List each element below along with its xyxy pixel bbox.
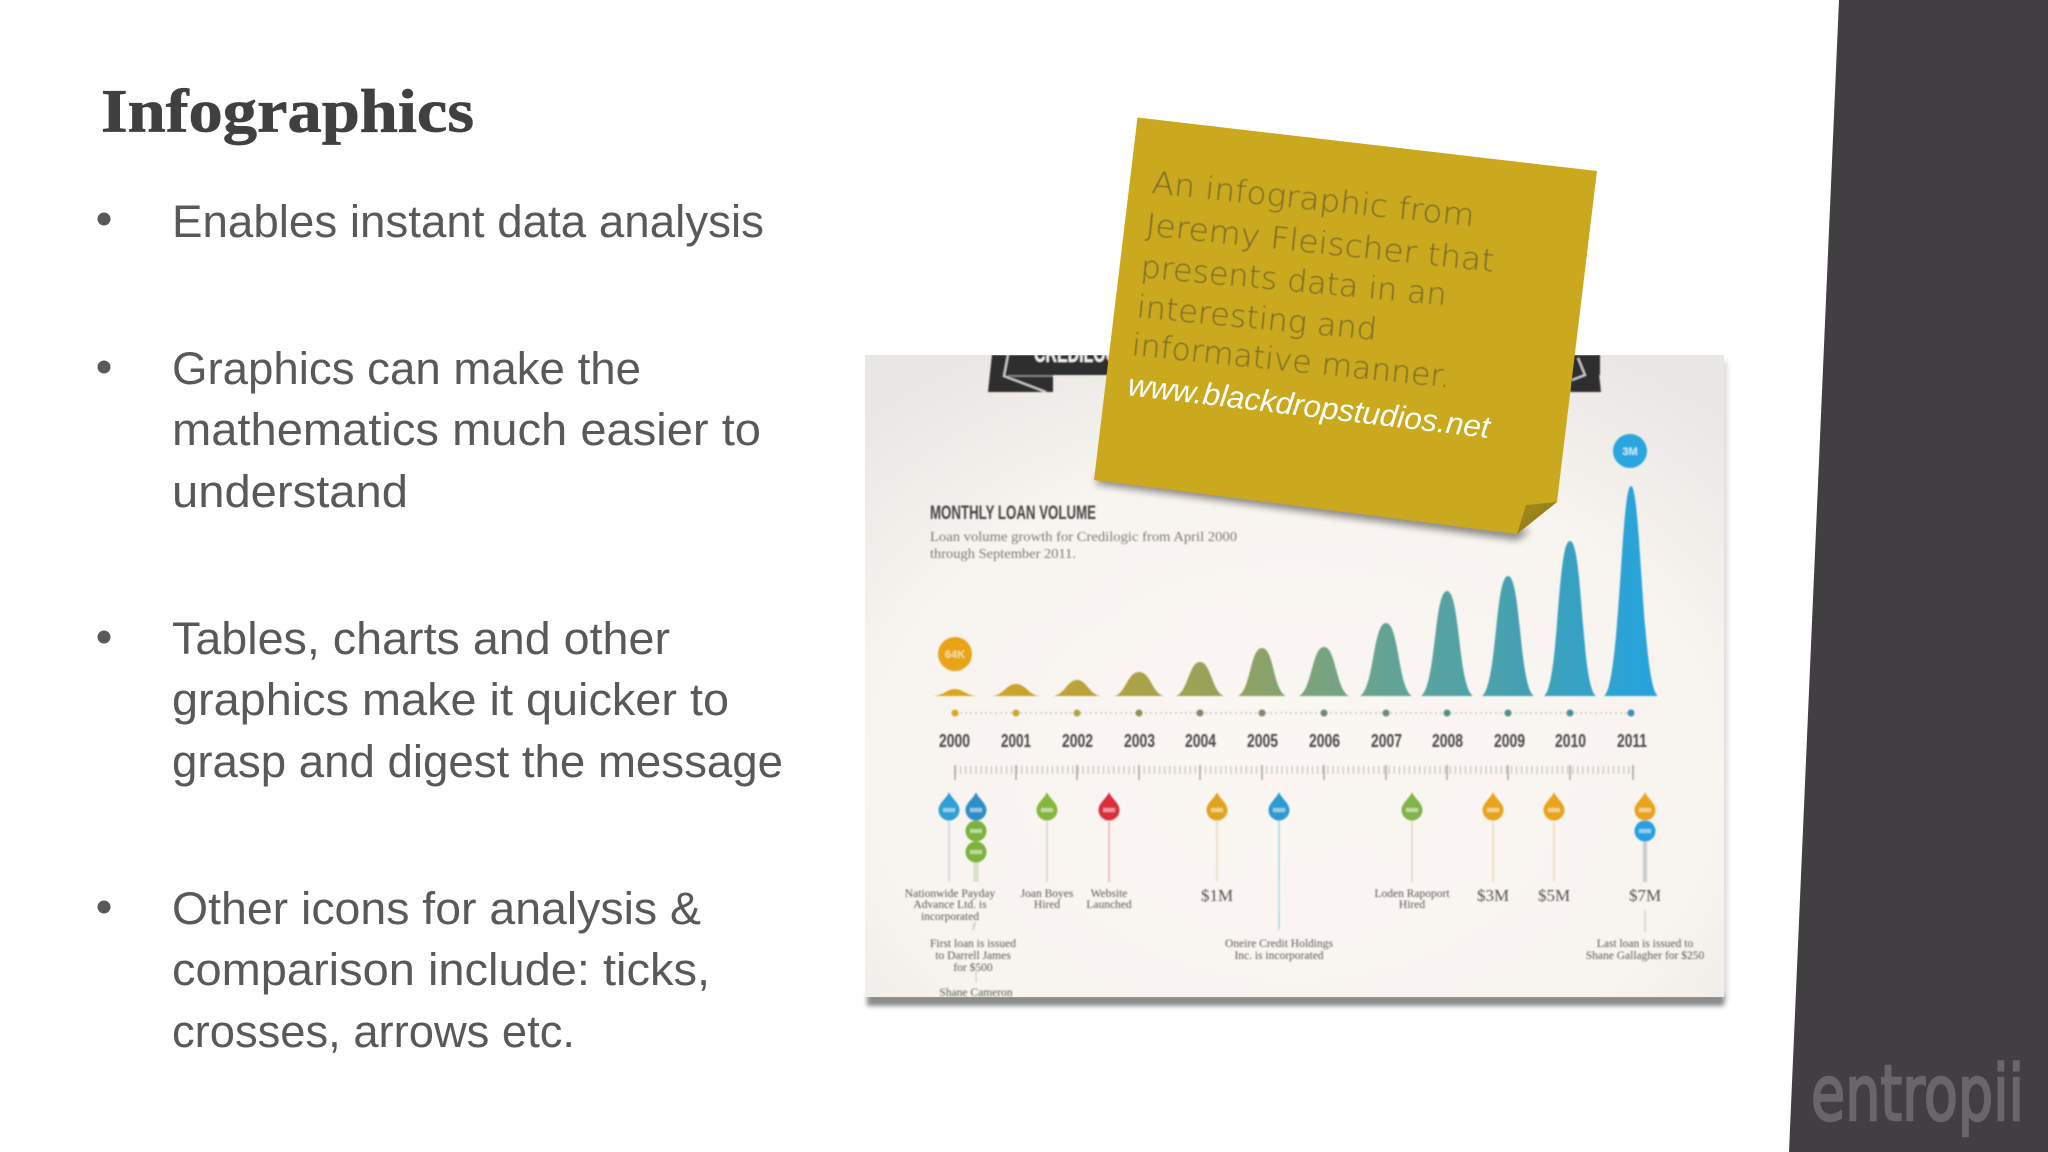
year labels: 2005 [1247,731,1278,751]
event labels: for $500 [953,961,993,974]
marker: 64K start value: 64K [945,649,965,661]
event stems [949,818,1645,982]
note handwriting text [1130,165,1496,395]
note handwriting text: interesting and [1135,289,1379,348]
marker: 3M end value [1613,434,1647,468]
note handwriting text: Jeremy Fleischer that [1144,207,1496,280]
marker: 3M end value: 3M [1622,446,1638,458]
event labels: Inc. is incorporated [1234,950,1324,962]
bullet 4: comparison include: ticks, [172,944,710,995]
bullet 3 [98,613,783,787]
year labels: 2004 [1185,731,1216,751]
bullet 2: Graphics can make the [172,343,641,394]
note handwriting text: informative manner. [1130,327,1452,395]
year labels: 2006 [1309,731,1340,751]
event labels: Hired [1399,899,1425,911]
event labels: $1M [1201,886,1233,905]
bell area chart [933,486,1658,696]
event labels: Advance Ltd. is [913,899,987,911]
year labels [938,733,1648,748]
bullet list [98,196,783,1057]
event labels: Last loan is issued to [1597,938,1693,950]
note fold [1517,502,1557,534]
marker: 64K start value [938,637,972,671]
year labels: 2001 [1001,731,1031,751]
bullet 3: grasp and digest the message [172,736,783,787]
bullet 2: mathematics much easier to [172,404,761,455]
year labels: 2007 [1371,731,1402,751]
event drop markers [938,792,1656,862]
event labels: incorporated [921,911,979,923]
bullet 4: Other icons for analysis & [172,883,701,934]
bullet 4: crosses, arrows etc. [172,1006,575,1057]
event labels: Shane Cameron [939,987,1013,999]
chart description: through September 2011. [930,546,1076,561]
event labels: Nationwide Payday [905,888,995,900]
event labels: Joan Boyes [1021,888,1074,900]
year labels: 2000 [939,731,970,751]
black ribbon banner [987,355,1602,393]
event labels: Launched [1086,899,1132,911]
right dark sidebar [1789,0,2048,1152]
event labels: Hired [1034,899,1060,911]
event labels: Website [1091,888,1127,900]
ruler ticks [955,765,1634,780]
year labels: 2002 [1062,731,1093,751]
year labels: 2008 [1432,731,1463,751]
black ribbon banner: CREDILOGIC [1034,340,1134,368]
chart description [930,529,1237,561]
event labels: First loan is issued [930,938,1016,950]
event labels: to Darrell James [935,950,1011,962]
sticky note shadow [1096,472,1530,540]
year labels: 2009 [1494,731,1525,751]
bullet 3: Tables, charts and other [172,613,670,664]
bullet 2 [98,343,761,517]
event labels: $3M [1477,886,1509,905]
chart description: Loan volume growth for Credilogic from April 2000 [930,529,1237,544]
panel: monthly loan volume infographic [865,340,1724,999]
bullet 3: graphics make it quicker to [172,674,729,725]
event labels: $5M [1538,886,1570,905]
dotted timeline [952,710,1634,716]
panel shadow [867,362,1727,1006]
year labels: 2011 [1617,731,1647,751]
event labels: Shane Gallagher for $250 [1586,949,1704,962]
event labels: $7M [1629,886,1661,905]
year labels: 2003 [1124,731,1155,751]
title: Infographics [101,78,474,146]
sticky note [1094,118,1597,534]
event labels [905,886,1704,999]
chart heading: MONTHLY LOAN VOLUME [930,503,1096,524]
note handwriting text: An infographic from [1150,165,1476,234]
bullet 4 [98,883,710,1057]
note URL: www.blackdropstudios.net [1126,367,1493,445]
year labels: 2010 [1555,731,1586,751]
event labels: Oneire Credit Holdings [1225,938,1334,950]
note handwriting text: presents data in an [1139,249,1448,313]
bullet 1: Enables instant data analysis [172,196,764,247]
event labels: Loden Rapoport [1374,888,1450,900]
bullet 2: understand [172,466,408,517]
